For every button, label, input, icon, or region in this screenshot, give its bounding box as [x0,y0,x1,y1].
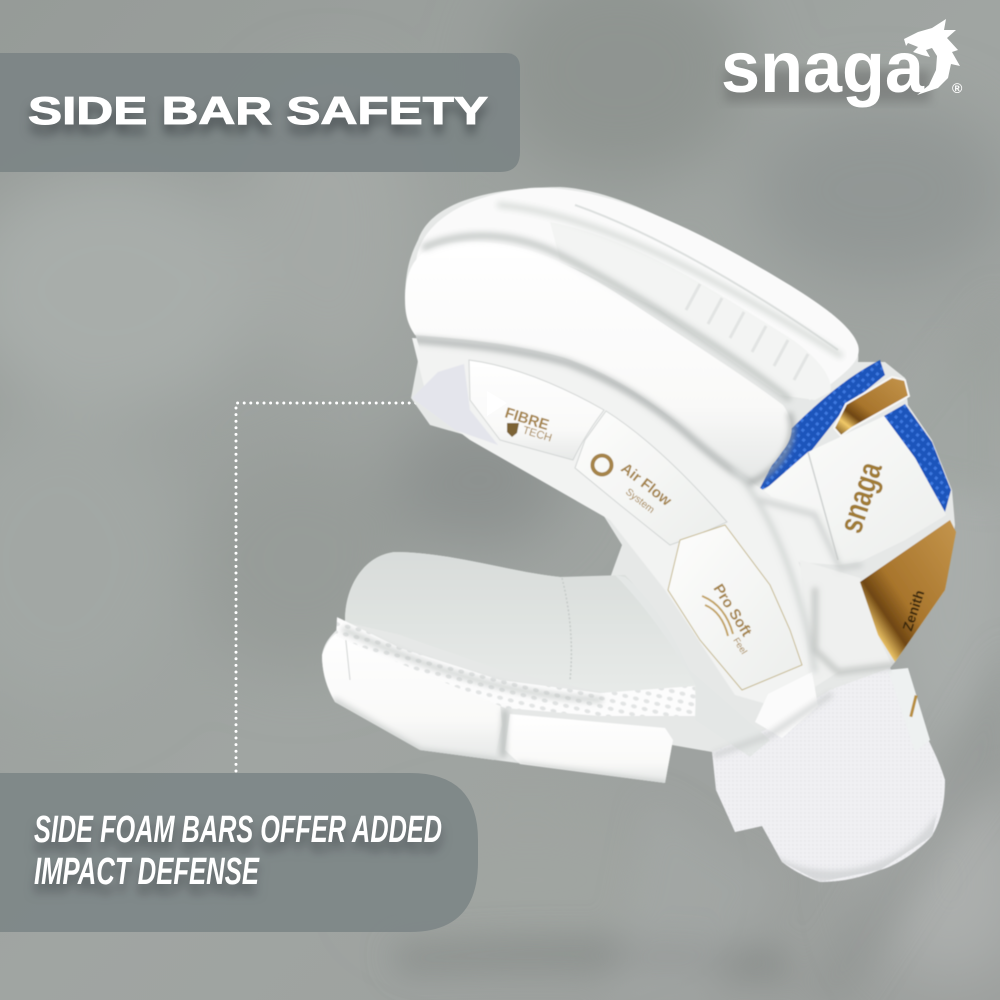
thumb pads [322,630,673,783]
mesh band [336,617,696,716]
pad: pro soft feel [668,525,802,690]
dotted leader line with arrow [236,403,488,771]
callout text: SIDE FOAM BARS OFFER ADDED [34,809,442,851]
icon: dragon head [904,19,960,95]
lower knuckle block [800,560,892,690]
callout text [34,809,442,893]
pad: air flow system: Air Flow [618,460,675,510]
arrow head [487,391,507,416]
glove shading between parts [335,205,940,876]
strap and knit at finger end [412,364,498,445]
blue leather panel [758,360,885,492]
knuckle block with logo: snaga [831,457,889,537]
side bar body [412,338,815,705]
glove product image [322,187,956,882]
wrist cuff [712,668,945,882]
registered mark: ® [952,80,963,96]
back fingers with ridges [416,188,859,400]
pad: fibre tech: TECH [521,424,553,445]
logo: snaga wordmark with dragon: snaga [721,28,925,108]
gold badge upper [834,377,909,436]
pad: air flow system [575,411,727,545]
palm: thumb [345,552,705,700]
pad: pro soft feel: Pro Soft [710,581,755,640]
gold badge lower: Zenith [899,588,927,633]
pad: fibre tech [469,360,604,460]
panel: callout [0,773,478,932]
pad: air flow system: System [623,487,656,516]
index finger roll [405,242,792,478]
gold badge lower [860,520,956,662]
blue leather panel right [884,404,951,512]
glove base silhouette [322,187,955,882]
elastic [755,672,818,738]
pad: pro soft feel: Feel [731,636,749,656]
palm seam strip [615,575,770,757]
heading: side bar safety: SIDE BAR SAFETY [28,90,488,133]
knuckle block with logo [760,416,946,565]
callout text: IMPACT DEFENSE [34,851,260,893]
panel: title banner [0,53,520,172]
pad: fibre tech: FIBRE [503,405,551,434]
